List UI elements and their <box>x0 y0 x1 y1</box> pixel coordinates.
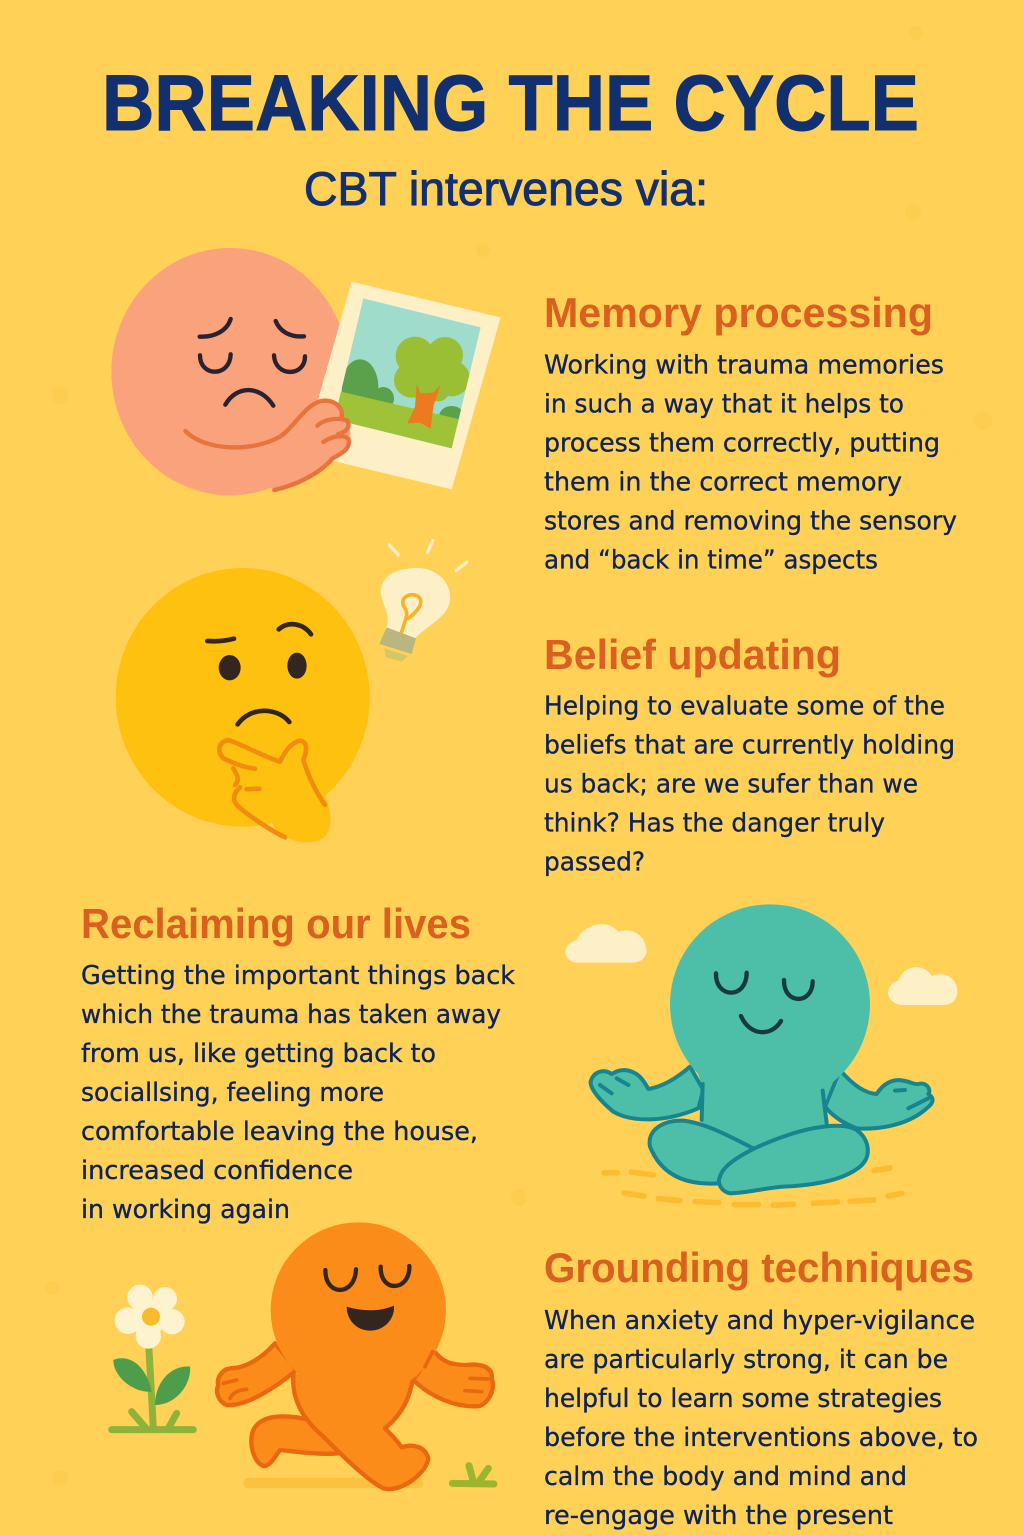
body <box>293 1373 428 1489</box>
text block: grounding techniques: before the interventions above, to <box>544 1423 978 1453</box>
icon: light bulb <box>379 541 467 662</box>
heading: grounding techniques: Grounding techniques <box>544 1244 974 1291</box>
text block: grounding techniques: helpful to learn some strategies <box>544 1384 942 1414</box>
text block: belief updating: Helping to evaluate some of the <box>544 692 945 722</box>
illustration: meditating figure <box>565 904 957 1205</box>
text block: grounding techniques: re-engage with the present <box>544 1501 893 1531</box>
illustration: thinking face with light bulb <box>116 541 467 842</box>
illustration: walking figure with flower <box>112 1222 494 1489</box>
photo print <box>303 282 501 489</box>
text block: belief updating: passed? <box>544 848 645 878</box>
subtitle: CBT intervenes via: <box>304 162 708 215</box>
panel: belief updating <box>116 541 955 878</box>
text block: reclaiming our lives: increased confidence <box>81 1156 353 1186</box>
arms <box>217 1343 493 1406</box>
panel: reclaiming our lives <box>81 900 957 1225</box>
thinking facial features <box>207 624 311 724</box>
arms <box>591 1067 933 1129</box>
hand outline <box>219 740 325 837</box>
text block: reclaiming our lives: which the trauma has taken away <box>81 1000 501 1030</box>
text block: memory processing: Working with trauma memories <box>544 350 944 380</box>
text block: belief updating: beliefs that are currently holding <box>544 730 955 760</box>
title: BREAKING THE CYCLE <box>102 58 919 147</box>
face circle <box>111 248 349 495</box>
text block: reclaiming our lives: Getting the important things back <box>81 961 515 991</box>
text block: grounding techniques: When anxiety and hyper-vigilance <box>544 1306 975 1336</box>
text block: grounding techniques <box>544 1306 978 1531</box>
text block: belief updating <box>544 692 955 878</box>
text block: reclaiming our lives: in working again <box>81 1195 290 1225</box>
finger lines <box>223 1352 488 1398</box>
back leg <box>251 1416 343 1466</box>
torso and head <box>670 904 870 1153</box>
heading: memory processing: Memory processing <box>544 289 933 336</box>
illustration: sad face holding a photo <box>111 248 501 495</box>
panel: grounding techniques <box>112 1222 978 1531</box>
ground dashes <box>604 1168 902 1205</box>
text block: belief updating: us back; are we sufer than we <box>544 770 918 800</box>
icon: flower <box>112 1285 193 1430</box>
text block: belief updating: think? Has the danger truly <box>544 808 885 838</box>
torso and finger lines <box>600 1078 928 1123</box>
text block: memory processing: and “back in time” aspects <box>544 546 878 576</box>
head <box>271 1222 446 1398</box>
text block: memory processing: in such a way that it helps to <box>544 390 904 420</box>
icon: grass tuft <box>452 1466 494 1484</box>
hand and arm <box>237 400 350 491</box>
crossed legs <box>650 1121 868 1193</box>
heading: reclaiming our lives: Reclaiming our lives <box>81 900 471 947</box>
text block: reclaiming our lives: sociallsing, feeling more <box>81 1078 384 1108</box>
text block: grounding techniques: calm the body and mind and <box>544 1462 907 1492</box>
text block: memory processing: process them correctly, putting <box>544 428 940 458</box>
text block: grounding techniques: are particularly strong, it can be <box>544 1345 948 1375</box>
shadow <box>243 1478 423 1488</box>
text block: reclaiming our lives: from us, like getting back to <box>81 1039 436 1069</box>
clouds <box>565 924 957 1005</box>
calm facial features <box>716 973 813 1032</box>
face circle with hand <box>116 568 370 842</box>
panel: memory processing <box>111 248 957 576</box>
text block: memory processing: stores and removing the sensory <box>544 506 957 536</box>
happy facial features <box>325 1266 409 1290</box>
sad facial features <box>200 319 305 406</box>
heading: belief updating: Belief updating <box>544 631 841 678</box>
text block: reclaiming our lives <box>81 961 515 1225</box>
arm and finger lines <box>185 401 349 490</box>
text block: memory processing <box>544 350 957 576</box>
text block: memory processing: them in the correct memory <box>544 468 902 498</box>
text block: reclaiming our lives: comfortable leaving the house, <box>81 1117 478 1147</box>
